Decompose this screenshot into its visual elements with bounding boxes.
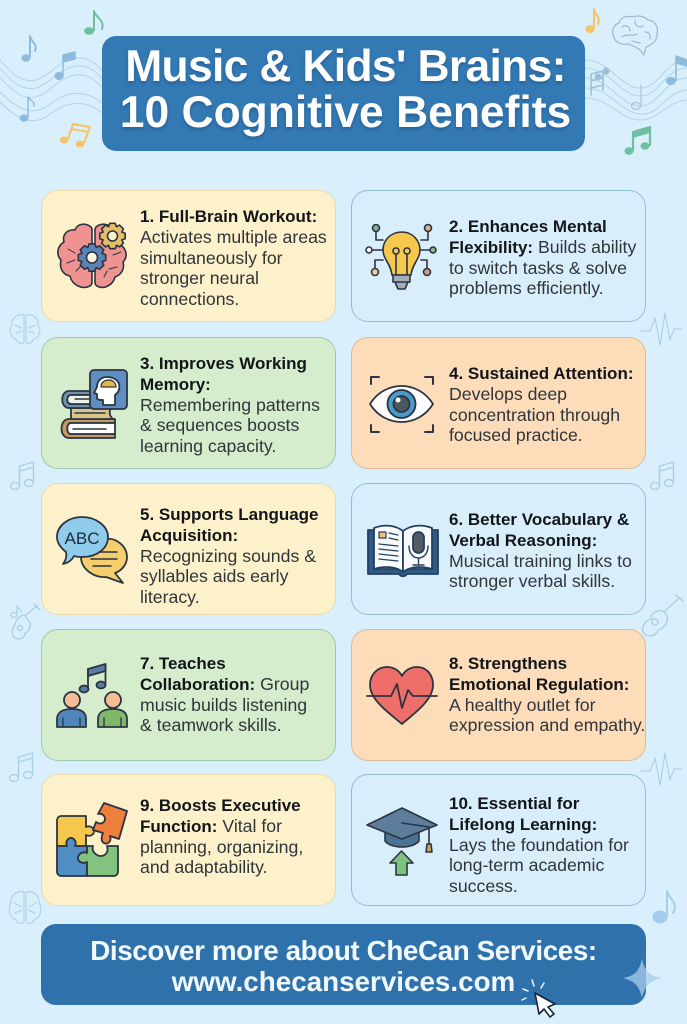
call to action text: Discover more about CheCan Services: — [90, 934, 597, 966]
title banner — [102, 36, 585, 151]
text: supports language acquisition: Acquisition: — [140, 526, 238, 545]
panel: 7 teaches collaboration — [41, 629, 336, 761]
text: essential for lifelong learning — [449, 794, 629, 896]
icon: speech bubbles ABC — [56, 516, 128, 584]
text: strengthens emotional regulation: A healthy outlet for — [449, 695, 596, 715]
title text: 10 Cognitive Benefits — [120, 88, 571, 137]
green note top — [84, 11, 103, 35]
text: full-brain workout: connections. — [140, 289, 239, 309]
text: teaches collaboration: & teamwork skills. — [140, 715, 282, 735]
text: essential for lifelong learning: long-term academic — [449, 855, 604, 875]
icon: open book with microphone — [367, 524, 439, 578]
text: boosts executive function — [140, 796, 303, 877]
beamed note outline lower left — [10, 753, 32, 782]
text: better vocabulary and verbal reasoning: Musical training links to — [449, 551, 632, 571]
text: sustained attention: concentration through — [449, 405, 620, 425]
call to action text — [90, 934, 597, 996]
panel: 1 full-brain workout — [41, 190, 336, 322]
text: strengthens emotional regulation: 8. Strengthens — [449, 654, 567, 673]
text: essential for lifelong learning: Lays the foundation for — [449, 835, 629, 855]
panel: 5 supports language acquisition — [41, 483, 336, 615]
text: boosts executive function: Function: Vital for — [140, 816, 282, 836]
beamed note outline right — [650, 462, 674, 490]
brain outline lower left — [9, 892, 41, 924]
text: better vocabulary and verbal reasoning: 6. Better Vocabulary & — [449, 510, 629, 529]
text: essential for lifelong learning: success. — [449, 876, 518, 896]
text: supports language acquisition — [140, 505, 319, 607]
text: sustained attention: Develops deep — [449, 384, 567, 404]
text: enhances mental flexibility: Flexibility: Builds ability — [449, 237, 636, 257]
text: improves working memory: & sequences boosts — [140, 415, 299, 435]
blue note top left — [22, 36, 36, 62]
pulse wave right upper — [641, 313, 682, 345]
blue note lower right — [652, 891, 675, 924]
panel: 8 strengthens emotional regulation — [351, 629, 646, 761]
text: enhances mental flexibility: 2. Enhances Mental — [449, 217, 607, 236]
text: better vocabulary and verbal reasoning: Verbal Reasoning: — [449, 531, 597, 550]
text: boosts executive function: 9. Boosts Executive — [140, 796, 301, 815]
title text — [120, 42, 571, 140]
text: teaches collaboration: Collaboration: Group — [140, 674, 309, 694]
blue flagged note right edge — [666, 56, 687, 85]
beamed notes on right staff — [591, 68, 610, 95]
text: supports language acquisition: 5. Supports Language — [140, 505, 319, 524]
green beamed notes — [624, 127, 650, 155]
panel: 6 better vocabulary and verbal reasoning — [351, 483, 646, 615]
text: essential for lifelong learning: Lifelong Learning: — [449, 815, 597, 834]
text: improves working memory — [140, 354, 320, 456]
icon: two people with music note — [56, 663, 128, 728]
icon: eye in focus brackets — [369, 376, 434, 433]
text: sustained attention: 4. Sustained Attention: — [449, 364, 634, 383]
text: teaches collaboration — [140, 654, 309, 735]
text: supports language acquisition: literacy. — [140, 587, 200, 607]
text: full-brain workout: stronger neural — [140, 268, 259, 288]
brain outline top right — [613, 16, 657, 55]
outlined note on right staff — [632, 85, 641, 110]
text: full-brain workout — [140, 207, 327, 309]
text: full-brain workout: simultaneously for — [140, 248, 283, 268]
blue flagged note on staff — [54, 52, 75, 80]
icon: light bulb circuit — [365, 224, 437, 290]
yellow beamed notes — [60, 124, 90, 148]
icon: speech bubbles ABC: ABC — [65, 529, 99, 548]
text: boosts executive function: planning, organizing, — [140, 837, 303, 857]
text: sustained attention: focused practice. — [449, 425, 583, 445]
text: enhances mental flexibility: to switch tasks & solve — [449, 258, 627, 278]
blue note lower left — [20, 97, 34, 122]
icon: jigsaw puzzle — [56, 802, 128, 877]
text: better vocabulary and verbal reasoning: stronger verbal skills. — [449, 571, 615, 591]
panel: 3 improves working memory — [41, 337, 336, 469]
guitar right — [643, 595, 683, 636]
text: improves working memory: Memory: — [140, 375, 211, 394]
icon: brain with gears — [57, 222, 127, 288]
call to action banner — [41, 924, 646, 1005]
text: improves working memory: Remembering patterns — [140, 395, 320, 415]
call to action text: www.checanservices.com — [172, 966, 515, 996]
text: improves working memory: learning capacity. — [140, 436, 276, 456]
brain outline left upper — [10, 315, 40, 344]
text: sustained attention — [449, 364, 634, 445]
icon: heart with pulse line — [366, 666, 438, 725]
text: improves working memory: 3. Improves Working — [140, 354, 307, 373]
text: strengthens emotional regulation: Emotional Regulation: — [449, 675, 629, 694]
pulse wave right lower — [641, 753, 682, 785]
icon: graduation cap with arrow — [366, 807, 438, 876]
icon: books with head — [60, 369, 128, 439]
text: enhances mental flexibility — [449, 217, 636, 298]
text: better vocabulary and verbal reasoning — [449, 510, 632, 591]
text: essential for lifelong learning: 10. Essential for — [449, 794, 579, 813]
panel: 4 sustained attention — [351, 337, 646, 469]
text: teaches collaboration: music builds listening — [140, 695, 307, 715]
title text: Music & Kids' Brains: — [125, 42, 566, 91]
guitar left — [12, 604, 40, 639]
text: supports language acquisition: Recognizing sounds & — [140, 546, 316, 566]
panel: 9 boosts executive function — [41, 774, 336, 906]
panel: 2 enhances mental flexibility — [351, 190, 646, 322]
small note left — [11, 606, 21, 618]
text: full-brain workout: 1. Full-Brain Workout: — [140, 207, 317, 226]
beamed note outline left — [10, 462, 34, 490]
text: strengthens emotional regulation — [449, 654, 645, 735]
text: full-brain workout: Activates multiple areas — [140, 227, 327, 247]
text: supports language acquisition: syllables aids early — [140, 566, 288, 586]
text: strengthens emotional regulation: expression and empathy. — [449, 715, 645, 735]
panel: 10 essential for lifelong learning — [351, 774, 646, 906]
text: boosts executive function: and adaptability. — [140, 857, 268, 877]
left music staff — [0, 58, 103, 121]
yellow note top right — [585, 9, 599, 33]
right music staff — [585, 60, 687, 120]
text: teaches collaboration: 7. Teaches — [140, 654, 226, 673]
text: enhances mental flexibility: problems efficiently. — [449, 278, 604, 298]
